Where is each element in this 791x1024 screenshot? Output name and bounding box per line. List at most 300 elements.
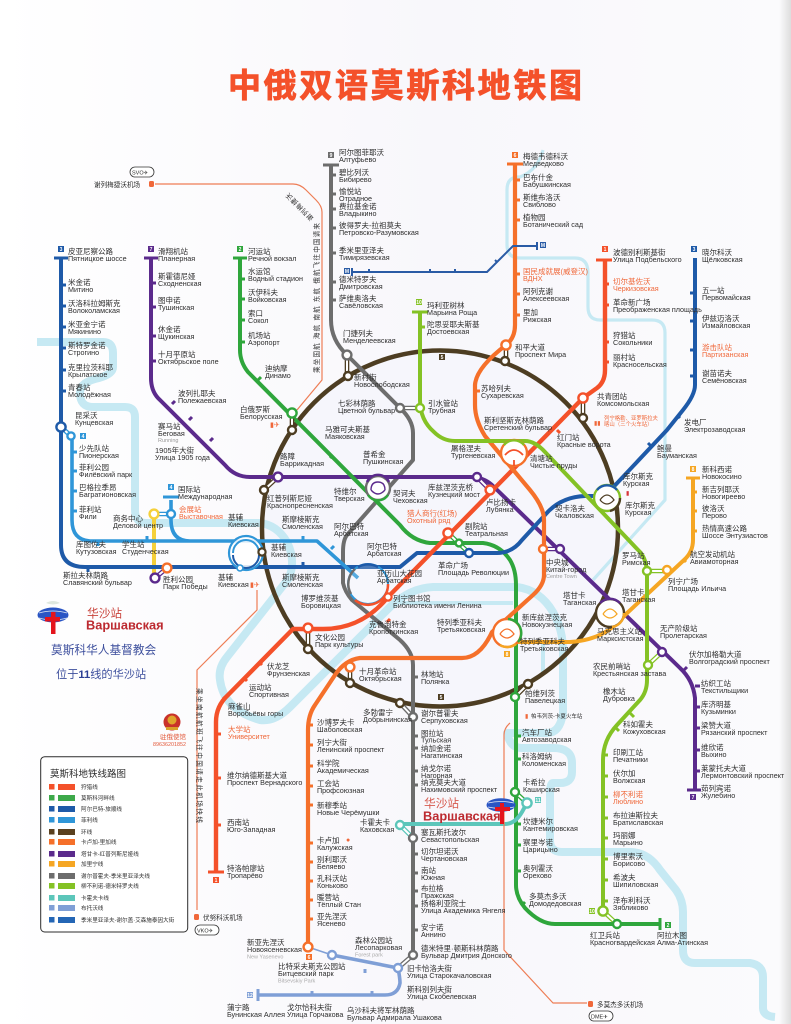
legend row 12: 布托沃线 [81,904,104,912]
stations on line 10: 希波夫 [613,873,636,882]
stations on line 3 east: Семёновская [702,376,747,385]
stations in centre: 塔甘卡 [563,591,586,600]
stations on line 2 south: 多莫杰多沃 [529,892,566,901]
stations on line 6 south: 新穆季站 [317,801,347,810]
stations on line 7 south-east: 伏尔加格勒大道 [689,650,742,659]
stations on line 2 south: 察里岑诺 [523,838,553,847]
airport VKO label and icon: VKO✈ [197,928,214,934]
stations on line 8: 热情高速公路 [702,524,747,533]
stations on line 7: Сходненская [158,279,202,288]
icon: national emblem [164,714,180,730]
legend row 13 [49,916,175,924]
stations on line 9 north: 愉悦站 [339,187,362,196]
stations on line 2 north: 河运站 [248,247,270,256]
stations on line 3 west: 沃洛科拉姆斯克 [68,299,120,308]
stations on line 3 east: Измайловская [702,321,750,330]
stations on line 9 south: 纳加金诺 [421,744,451,753]
airport express note south: 乘坐南航航班飞往中国请走此机场快线 [195,688,204,823]
stations on line 10: Шипиловская [613,880,658,889]
stations on line 3 east: 库尔斯克 [625,501,655,510]
stations on line 9 south: 纳克莫夫大道 [421,778,466,787]
stations on line 1 south: 特洛帕廖站 [227,864,264,873]
stations on line 3 east: Курская [623,479,650,488]
stations on line 9 north: 季米里亚泽夫 [339,246,384,255]
stations on line 6 north: Алексеевская [523,294,569,303]
stations on line 1 south: Проспект Вернадского [227,778,302,787]
stations on line 7 south-east: Лермонтовский проспект [701,771,785,780]
stations on line 1 north: Красные ворота [557,440,611,449]
stations in centre: Третьяковская [437,625,486,634]
stations on line 8: Шоссе Энтузиастов [702,531,768,540]
stations on line 2 north: 机场站 [248,331,270,340]
stations in centre: 契诃夫 [393,489,416,498]
stations on line 7: 图申诺 [158,296,180,305]
legend panel [41,757,188,932]
stations on line 7 south-east: 库济明基 [701,700,731,709]
stations on line 6 south: 科学院 [317,759,340,768]
stations in centre: Арбатская [367,549,402,558]
stations on line 6 south: Профсоюзная [317,786,364,795]
stations in centre: 卢比扬卡 [486,498,516,507]
legend row 10: 柳不利诺-德米特罗夫线 [81,882,139,890]
stations on line 4: 菲利公园 [79,463,109,472]
stations on line 6 south: 别利耶沃 [317,855,347,864]
stations on line 9 north: Новослободская [354,380,410,389]
legend row 9: 谢尔普霍夫-季米里亚泽夫线 [81,872,150,880]
stations on line 1 south: 维尔纳德斯基大道 [227,771,287,780]
line 7 purple [144,258,701,790]
stations on line 2 north: Аэропорт [248,338,280,347]
rail and airport markers: ▮ [626,491,629,497]
stations on line 12 [227,817,492,1022]
stations on line 7 south-east: 梁赞大道 [701,721,731,730]
airport SVO label and icon: SVO✈ [132,170,149,176]
stations in centre: 博罗维茨基 [301,594,338,603]
legend row 1 [49,783,98,791]
stations on line 10: 印刷工站 [613,748,643,757]
legend row 11 [49,894,109,902]
stations on line 2 north: 水运馆 [248,267,270,276]
stations on line 2 south: Алма-Атинская [657,938,708,947]
stations in centre: 阿尔巴特 [334,522,364,531]
line 11 teal [400,803,527,824]
stations on line 12: Бульвар Адмирала Ушакова [347,1013,442,1022]
line number badges: M [541,243,545,249]
stations on line 6 north: Ботанический сад [523,220,584,229]
stations on line 6 south: Октябрьская [359,674,402,683]
stations in centre: Театральная [465,529,508,538]
stations on line 2 south: 汽车厂站 [522,728,552,737]
stations in centre: Арбатская [334,529,369,538]
line number badges: 6 [514,153,517,159]
stations on line 2 south: Павелецкая [525,696,565,705]
stations on line 4: Пионерская [79,451,119,460]
stations on line 3 west: Славянский бульвар [63,578,132,587]
stations on line 7: 波列扎耶夫 [178,389,216,398]
stations on line 9 north: 彼得罗夫-拉祖莫夫 [339,221,402,230]
stations on line 6 north: 和平大道 [515,343,545,352]
stations on line 6 north: 梅德韦德科沃 [523,152,568,161]
stations on line 6 north: 里加 [523,308,538,317]
church callout west: 华沙站 [87,606,122,620]
stations on line 7 south-east: 茹列宾诺 [701,784,731,793]
stations on line 2 south: Красногвардейская [590,938,655,947]
stations on line 4: 基辅 [218,573,233,582]
stations in centre: Краснопресненская [267,501,333,510]
stations on line 10: 农民前哨站 [593,662,630,671]
stations on line 4: 国际站 [178,485,200,494]
stations on line 1 north: 切尔基佐沃 [613,277,650,286]
line 3 dark blue [54,258,695,572]
line number badges: 12 [247,993,253,999]
stations on line 9 north: 萨维奥洛夫 [339,294,376,303]
stations on line 6 south: Коньково [317,881,348,890]
stations on line 7 south-east: 维欣诺 [701,743,724,752]
stations on line 7 south-east: Пролетарская [660,631,707,640]
stations on line 10: Марьина Роща [427,308,477,317]
line number badges: 10 [416,300,422,306]
airport DME label and icon: 多莫杰多沃机场 [597,1000,644,1009]
legend row 7 [49,850,139,858]
legend row 2 [49,794,115,802]
airport SVO label and icon: 谢列梅捷沃机场 [94,180,141,189]
stations in centre: 猎人商行(红场) [407,509,457,518]
stations on line 10 [427,300,666,912]
stations on line 9 south: Нахимовский проспект [421,785,498,794]
stations in centre: 亚历山大花园 [377,569,422,578]
line number badges: 3 [60,247,63,253]
stations on line 6 south: 亚先涅沃 [317,912,347,921]
stations on line 3 east: 伊兹迈洛沃 [702,314,740,323]
stations on line 6 north: Медведково [523,159,564,168]
stations on line 7 [155,246,227,462]
stations on line 12: Улица Старокачаловская [407,971,492,980]
legend row 6: 卡卢加-里加线 [81,838,117,846]
stations on line 2 south: 卡希拉 [523,778,546,787]
stations in centre: Пушкинская [363,457,404,466]
stations in centre: Библиотека имени Ленина [393,601,482,610]
stations on line 3 west: Кунцевская [75,418,113,427]
stations on line 10: Люблино [613,797,643,806]
stations on line 6 north: 植物园 [523,213,546,222]
stations on line 1 north: Комсомольская [597,399,649,408]
stations in centre: Кузнецкий мост [428,490,481,499]
stations on line 12: 森林公园站 [355,936,392,945]
stations on line 1 south: 西南站 [227,818,250,827]
stations on line 4: 胜利公园 [163,575,193,584]
stations on line 7: Октябрьское поле [158,357,219,366]
stations in centre: Чистые пруды [530,461,577,470]
stations on line 3 west: Волоколамская [68,306,120,315]
stations on line 4: Багратионовская [79,490,136,499]
stations on line 1 north: Черкизовская [613,284,659,293]
stations in centre: 特列季亚科夫 [437,618,482,627]
stations on line 6 north: 巴布什金 [523,173,553,182]
stations on line 7: 滑翔机站 [158,247,188,256]
stations on line 12: 乌沙科夫将军林荫路 [347,1006,414,1015]
stations on line 8: 塔甘卡 [622,588,644,597]
stations on line 7 south-east: Кузьминки [701,707,736,716]
stations on line 9 north: 碧比列沃 [339,168,369,177]
stations on line 1 north: 共青团站 [597,392,627,401]
legend row 9 [49,872,150,880]
line number badges: 8 [506,652,509,658]
rail and airport markers: ▮✈ [270,422,280,429]
stations on line 12: 卡霍夫卡 [360,818,390,827]
stations on line 4: 少先队站 [79,444,109,453]
stations on line 6 south [247,666,402,960]
monorail line 13 [352,242,537,276]
stations on line 2 south: 帕韦列茨-卡夏火车站 [531,712,583,720]
stations on line 9 south: Полянка [421,677,449,686]
stations on line 7: Тушинская [158,303,194,312]
stations on line 7: 十月平原站 [158,350,196,359]
stations on line 1 north: 喀山（三个火车站） [604,420,653,428]
embassy emblem and note [153,714,186,748]
stations on line 10: 罗马站 [622,551,644,560]
stations on line 1 south: 大学站 [228,725,250,734]
stations on line 9 north: 门捷列夫 [343,329,373,338]
stations in centre: 特列季亚科夫 [520,637,565,646]
stations on line 12: 斯科别列夫街 [407,985,452,994]
stations on line 4: Киевская [271,550,302,559]
stations on line 6 south: Академическая [317,766,369,775]
stations on line 6 south: Шаболовская [317,725,362,734]
stations on line 2 north: Речной вокзал [248,254,296,263]
stations on line 6 south: Тёплый Стан [317,900,361,909]
stations on line 9 south: Бульвар Дмитрия Донского [421,951,512,960]
legend row 8: 加里宁线 [81,860,104,868]
stations on line 3 west: 克里拉茨科耶 [68,363,113,372]
stations on line 7: Полежаевская [178,396,227,405]
stations on line 9 south: 林地站 [421,670,444,679]
interchange connectors [61,345,667,968]
stations on line 7 south-east: 纺织工站 [701,679,731,688]
stations on line 3 west: 斯拉夫林荫路 [63,571,108,580]
stations on line 10: Зябликово [613,903,648,912]
church callout on line 11: Варшавская [423,808,501,824]
stations on line 3 west: 米亚金宁诺 [68,320,106,329]
stations on line 3 west: 库图佐夫 [76,540,106,549]
stations on line 8: 新科西诺 [702,465,732,474]
stations on line 2 south: 奥列霍沃 [523,864,553,873]
line number badges: 1 [604,247,607,253]
line number badges: 5 [440,695,443,701]
stations on line 9 north: Дмитровская [339,282,383,291]
embassy emblem and note: 89636201852 [153,742,186,748]
line 10 lime [412,312,647,911]
rail and airport markers: ● [346,837,350,844]
stations on line 3 east: 晓尔科沃 [702,248,732,257]
line number badges: 8 [692,467,695,473]
stations on line 6 north: Бабушкинская [523,180,571,189]
stations on line 6 south: New Yasenevo [247,954,284,960]
stations on line 9 north: 新村街 [354,373,376,382]
stations on line 2 north: Водный стадион [248,274,303,283]
stations on line 1 north: 丽村站 [613,353,636,362]
rail and airport markers: ▮✈ [250,582,260,589]
line number badges: 4 [82,434,85,440]
stations on line 3 east: Партизанская [702,350,748,359]
stations on line 9 south: Пражская [421,891,454,900]
line 8 yellow [154,478,700,642]
circle line interior tint [264,352,616,704]
stations in centre: 马雅可夫斯基 [325,425,370,434]
stations in centre: 屠格涅夫 [451,444,481,453]
stations on line 3 west: Кутузовская [76,547,117,556]
stations on line 1 south: 伏龙芝 [267,662,290,671]
stations on line 1 south: Тропарёво [227,871,263,880]
stations on line 10: 柳不利诺 [613,790,643,799]
stations on line 2 south: 红卫兵站 [590,931,620,940]
stations on line 4: Киевская [218,580,249,589]
line number badges: 1 [215,878,218,884]
line number badges: 3 [693,247,696,253]
stations in centre: Чеховская [393,496,428,505]
stations on line 7: 赛马站 [158,422,180,431]
church callout on line 11 [423,796,516,824]
stations on line 9 south [363,669,512,960]
stations on line 2 north: 沃伊科夫 [248,288,278,297]
stations on line 9 north: 费拉基金诺 [339,202,376,211]
stations on line 8: 航空发动机站 [690,550,735,559]
stations on line 10: 陀思妥耶夫斯基 [427,320,480,329]
stations on line 9 south: 图拉站 [421,729,444,738]
stations on line 9 south: 多勃雷宁 [363,708,393,717]
stations on line 3 east: 谢苗诺夫 [702,369,732,378]
stations on line 7 south-east: Текстильщики [701,686,748,695]
rail and airport markers: ▮ [525,714,528,720]
legend row 5 [49,828,93,836]
stations on line 1 south: Воробьёвы горы [228,709,283,718]
stations on line 9 south: 扬格利亚院士 [421,899,466,908]
stations on line 1 south: 文化公园 [315,633,345,642]
stations in centre: Арбатская [377,576,412,585]
stations on line 1 north: Красносельская [613,360,667,369]
line number badges: M [345,269,349,275]
stations on line 4: Фили [79,512,97,521]
stations on line 10: Трубная [428,406,456,415]
stations on line 1 north: 红门站 [557,433,580,442]
stations on line 2 south: 阿拉木图 [657,931,687,940]
stations on line 6 south: Новоясеневская [247,945,302,954]
stations on line 4: 基辅 [228,513,243,522]
legend row 10 [49,882,139,890]
stations on line 6 north [481,151,588,432]
stations on line 6 south: 孔科沃站 [317,874,347,883]
stations on line 4: Деловой центр [113,521,163,530]
stations on line 10: 玛丽娜 [613,831,636,840]
stations on line 6 south: Ясенево [317,919,345,928]
line number badges: 10 [589,909,595,915]
stations on line 4: 基辅 [271,543,286,552]
line 6 orange [308,164,544,947]
interchange: Chistye Prudy [501,440,527,466]
stations on line 6 north: 国民成就展(威登汉) [523,267,588,276]
stations in centre: Чкаловская [555,511,594,520]
stations on line 3 east: 发电厂 [684,418,706,427]
stations on line 3 west: 斯特罗金诺 [68,341,106,350]
stations on line 10: Печатники [613,755,648,764]
stations on line 6 south: Ленинский проспект [317,745,385,754]
stations on line 8: Таганская [622,595,655,604]
church callout west: Варшавская [86,618,164,632]
stations on line 10: Римская [622,558,651,567]
stations in centre: Тверская [334,494,365,503]
stations in centre: 普希金 [363,450,386,459]
stations on line 6 south: 十月革命站 [359,667,396,676]
stations on line 9 north: Цветной бульвар [338,406,395,415]
stations on line 10: Дубровка [603,694,635,703]
line 12 Butovo [258,947,413,1001]
stations in centre: 列宁图书馆 [393,594,430,603]
stations on line 4 [79,443,302,591]
stations on line 9 south: Чертановская [421,854,467,863]
icon: church globe and cross [38,601,68,634]
stations in centre: 特维尔 [334,487,356,496]
stations on line 2 north [240,246,303,421]
stations on line 2 south: 帕维列茨 [525,689,555,698]
stations on line 9 south: 谢尔普霍夫 [421,709,458,718]
legend panel: 莫斯科地铁线路图 [50,768,126,780]
stations on line 8: 列宁广场 [668,577,698,586]
stations on line 7: 休金诺 [158,325,180,334]
interchange: Tretyakovskaya [493,619,521,647]
stations on line 8: Новогиреево [702,492,745,501]
stations on line 6 north: ВДНХ [523,274,543,283]
airport SVO label and icon [94,167,154,189]
stations on line 9 north: 阿尔图菲耶沃 [339,148,384,157]
stations on line 3 west: 昆采沃 [75,411,98,420]
stations on line 8: 马克思主义站 [597,627,642,636]
stations on line 12: Улица Горчакова [287,1010,343,1019]
stations on line 3 west: 皮亚尼察公路 [68,247,113,256]
stations on line 1 north [557,247,702,449]
stations on line 3 east: Щёлковская [702,255,743,264]
legend row 3: 阿尔巴特-旅顺线 [81,805,122,813]
legend row 13: 季米里亚泽夫-谢尔盖·艾森施泰因大街 [81,916,175,924]
stations on line 6 north: Проспект Мира [515,350,566,359]
stations on line 1 north: 革命新广场 [613,298,650,307]
stations on line 3 west: Пятницкое шоссе [68,254,127,263]
interchange rings [229,440,624,647]
stations in centre: 斯摩棱斯克 [282,573,320,582]
stations on line 8: 彼洛沃 [702,504,724,513]
legend row 7: 塔甘卡-红普列斯尼娅线 [81,850,139,858]
stations on line 9 south: Улица Академика Янгеля [421,906,506,915]
stations on line 6 south: 沙博罗夫卡 [317,718,354,727]
stations on line 9 south: 德米特里·顿斯科林荫路 [421,944,498,953]
stations on line 1 north: 波德别利斯基街 [613,248,666,257]
line 1 red-orange [208,260,612,872]
stations on line 6 south: 暖营站 [317,893,340,902]
stations on line 12: 戈尔恰科夫街 [287,1003,332,1012]
stations on line 2 south: 科洛姆纳 [522,752,552,761]
stations on line 9 north: Бибирево [339,175,372,184]
stations on line 6 north: Рижская [523,315,552,324]
stations in centre: Маяковская [325,432,365,441]
stations on line 1 south: Парк культуры [315,640,363,649]
stations on line 10: 布拉迪斯拉夫 [613,811,658,820]
airport express note north: 谢列梅捷沃 [283,191,315,223]
stations on line 6 north: 阿列克谢 [523,287,553,296]
line number badges: 4 [170,485,173,491]
stations on line 7: Планерная [158,254,195,263]
airport express note north [283,191,321,373]
stations on line 2 north: 白俄罗斯 [240,405,270,414]
icon: church globe and cross [486,798,516,824]
stations on line 9 north: 七彩林荫路 [338,399,376,408]
